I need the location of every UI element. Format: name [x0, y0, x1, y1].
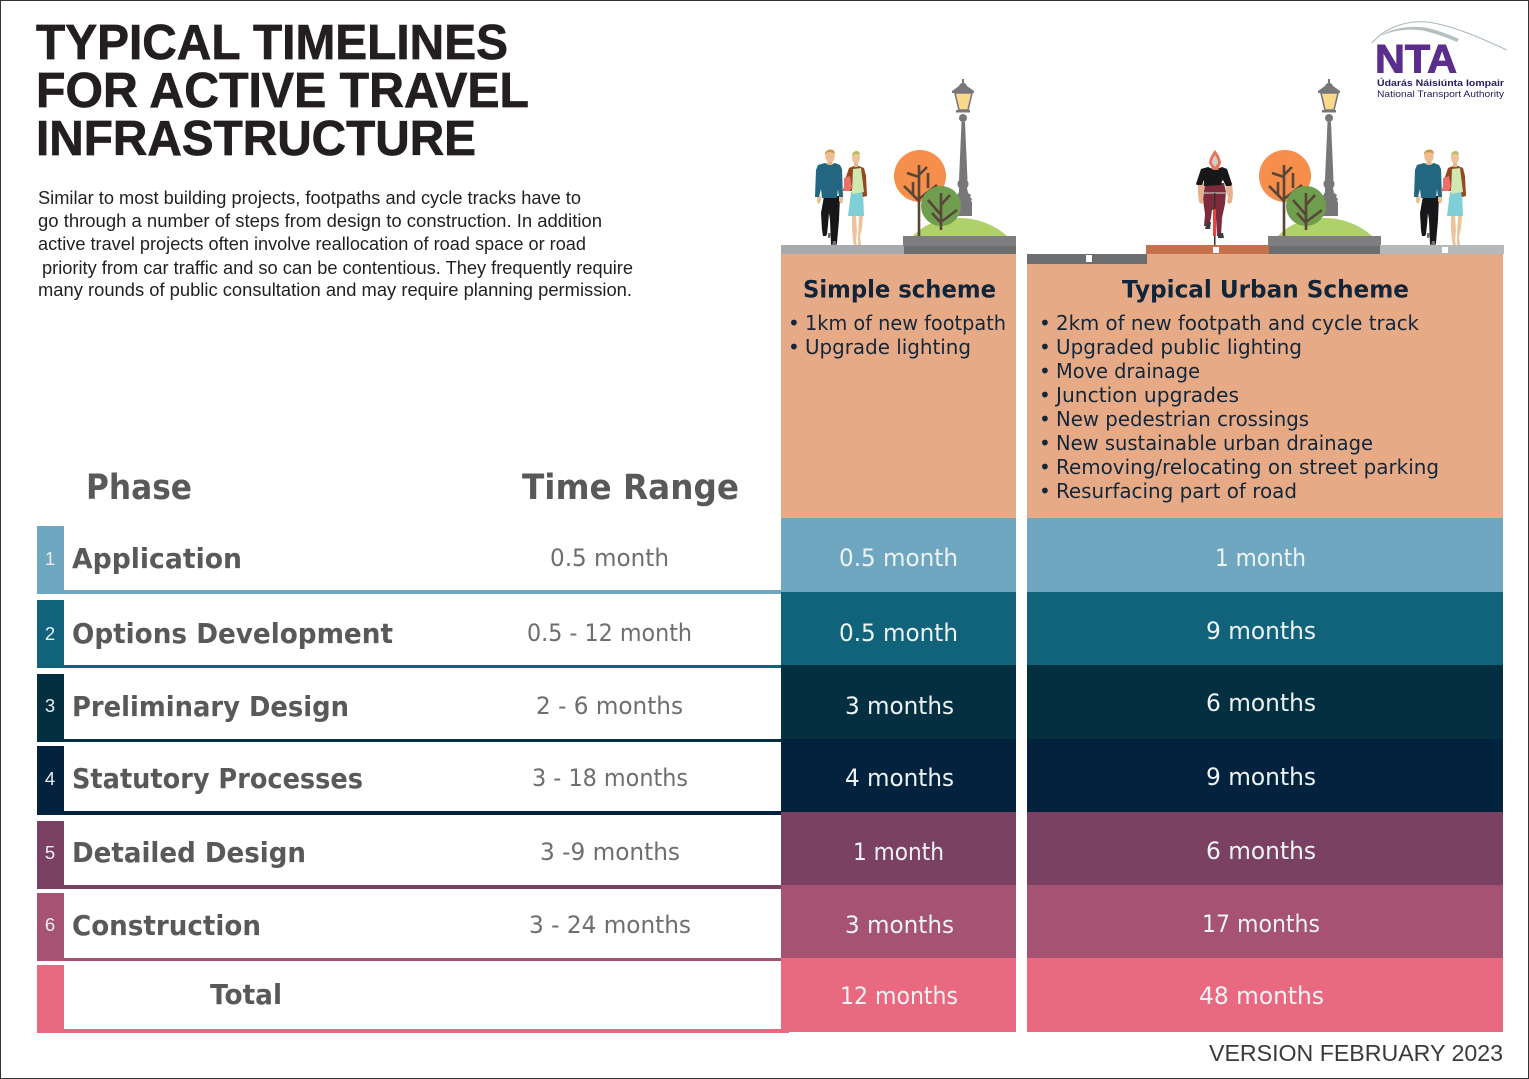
row 2: options development: 9 months	[1206, 617, 1316, 645]
row 5: detailed design: 6 months	[1206, 837, 1316, 865]
list: simple scheme items: 1km of new footpath	[805, 311, 1006, 335]
row 3: preliminary design: 3	[45, 695, 55, 716]
icon: trees and hill	[1259, 150, 1372, 236]
row 3: preliminary design	[37, 665, 1503, 742]
row 3: preliminary design: 6 months	[1206, 689, 1316, 717]
row 3: preliminary design: 3 months	[845, 692, 954, 720]
icon: couple walking	[815, 150, 867, 246]
row 6: construction: 6	[45, 914, 55, 935]
table headings: Phase	[86, 468, 192, 508]
logo: NTA: NTA	[1375, 38, 1457, 82]
list: urban scheme items: •	[1039, 359, 1051, 383]
list: urban scheme items: Removing/relocating on street parking	[1056, 455, 1439, 479]
row 5: detailed design: 3 -9 months	[540, 838, 680, 866]
icon: street lamp	[952, 79, 974, 216]
list: urban scheme items	[1039, 311, 1439, 503]
table headings: Time Range	[522, 468, 739, 508]
row 1: application	[37, 518, 1503, 594]
title	[36, 15, 529, 166]
list: urban scheme items: •	[1039, 407, 1051, 431]
row 1: application: 1 month	[1215, 544, 1306, 572]
list: urban scheme items: •	[1039, 479, 1051, 503]
panel: simple scheme description	[781, 254, 1016, 518]
row 2: options development: 0.5 - 12 month	[527, 619, 692, 647]
row 5: detailed design	[37, 812, 1503, 889]
panel: typical urban scheme description	[1027, 254, 1503, 518]
row: total: 12 months	[840, 982, 958, 1010]
footpath	[781, 245, 905, 254]
row 1: application: 0.5 month	[839, 544, 958, 572]
illustration: simple scheme street	[781, 79, 1016, 254]
footer: version: VERSION FEBRUARY 2023	[1209, 1040, 1503, 1066]
row 4: statutory processes: Statutory Processes	[72, 762, 363, 795]
road strip	[1027, 254, 1147, 264]
row 5: detailed design: 1 month	[853, 838, 944, 866]
logo: NTA: Údarás Náisiúnta Iompair	[1377, 77, 1504, 89]
title: FOR ACTIVE TRAVEL	[36, 63, 529, 118]
list: urban scheme items: New sustainable urban drainage	[1056, 431, 1373, 455]
row 4: statutory processes: 9 months	[1206, 763, 1316, 791]
table headings	[86, 468, 739, 508]
title: TYPICAL TIMELINES	[36, 15, 508, 70]
row 1: application: 1	[45, 548, 55, 569]
icon: street lamp	[1318, 79, 1340, 216]
list: urban scheme items: •	[1039, 455, 1051, 479]
row 6: construction: Construction	[72, 909, 261, 942]
row 6: construction: 17 months	[1202, 910, 1320, 938]
row 1: application: Application	[72, 542, 242, 575]
row 5: detailed design: 5	[45, 842, 55, 863]
list: urban scheme items: Move drainage	[1056, 359, 1200, 383]
cycle track strip	[1146, 245, 1269, 254]
intro text block	[38, 187, 633, 300]
list: simple scheme items: •	[788, 311, 800, 335]
list: urban scheme items: •	[1039, 311, 1051, 335]
row 6: construction: 3 months	[845, 911, 954, 939]
heading: simple scheme: Simple scheme	[803, 276, 996, 304]
list: urban scheme items: Upgraded public lighting	[1056, 335, 1302, 359]
heading: typical urban scheme: Typical Urban Scheme	[1122, 276, 1409, 304]
list: urban scheme items: Junction upgrades	[1054, 383, 1239, 407]
list: urban scheme items: Resurfacing part of road	[1056, 479, 1297, 503]
row 2: options development: Options Development	[72, 617, 393, 650]
intro text block: active travel projects often involve reallocation of road space or road	[38, 233, 586, 254]
list: simple scheme items: •	[788, 335, 800, 359]
planter	[903, 236, 1016, 254]
row 1: application: 0.5 month	[550, 544, 669, 572]
row 2: options development: 2	[45, 623, 55, 644]
row 2: options development: 0.5 month	[839, 619, 958, 647]
intro text block: priority from car traffic and so can be contentious. They frequently require	[42, 257, 633, 278]
list: urban scheme items: •	[1039, 431, 1051, 455]
row 5: detailed design: Detailed Design	[72, 836, 306, 869]
list: urban scheme items: New pedestrian crossings	[1056, 407, 1309, 431]
list: simple scheme items	[788, 311, 1006, 359]
list: urban scheme items: 2km of new footpath and cycle track	[1056, 311, 1419, 335]
intro text block: Similar to most building projects, footpaths and cycle tracks have to	[38, 187, 581, 208]
row: total: Total	[210, 978, 282, 1011]
row 2: options development	[37, 592, 1503, 668]
row 4: statutory processes: 4 months	[845, 764, 954, 792]
icon: cyclist	[1196, 150, 1233, 245]
list: urban scheme items: •	[1039, 335, 1051, 359]
row 4: statutory processes: 4	[45, 768, 55, 789]
row: total	[37, 958, 1503, 1033]
row 4: statutory processes: 3 - 18 months	[532, 764, 688, 792]
list: simple scheme items: Upgrade lighting	[805, 335, 971, 359]
footpath strip	[1380, 245, 1504, 254]
illustration: urban scheme street	[1027, 79, 1504, 264]
row 3: preliminary design: Preliminary Design	[72, 690, 349, 723]
logo: NTA	[1372, 22, 1507, 100]
planter	[1268, 236, 1381, 254]
row 3: preliminary design: 2 - 6 months	[536, 692, 683, 720]
row 6: construction: 3 - 24 months	[529, 911, 691, 939]
icon: couple walking	[1414, 150, 1466, 246]
title: INFRASTRUCTURE	[36, 111, 476, 166]
row: total: 48 months	[1199, 982, 1324, 1010]
icon: trees and hill	[894, 150, 1007, 236]
list: urban scheme items: •	[1039, 383, 1051, 407]
logo: NTA: National Transport Authority	[1377, 89, 1504, 100]
intro text block: go through a number of steps from design to construction. In addition	[38, 210, 602, 231]
row 6: construction	[37, 885, 1503, 961]
row 4: statutory processes	[37, 739, 1503, 815]
intro text block: many rounds of public consultation and may require planning permission.	[38, 279, 632, 300]
